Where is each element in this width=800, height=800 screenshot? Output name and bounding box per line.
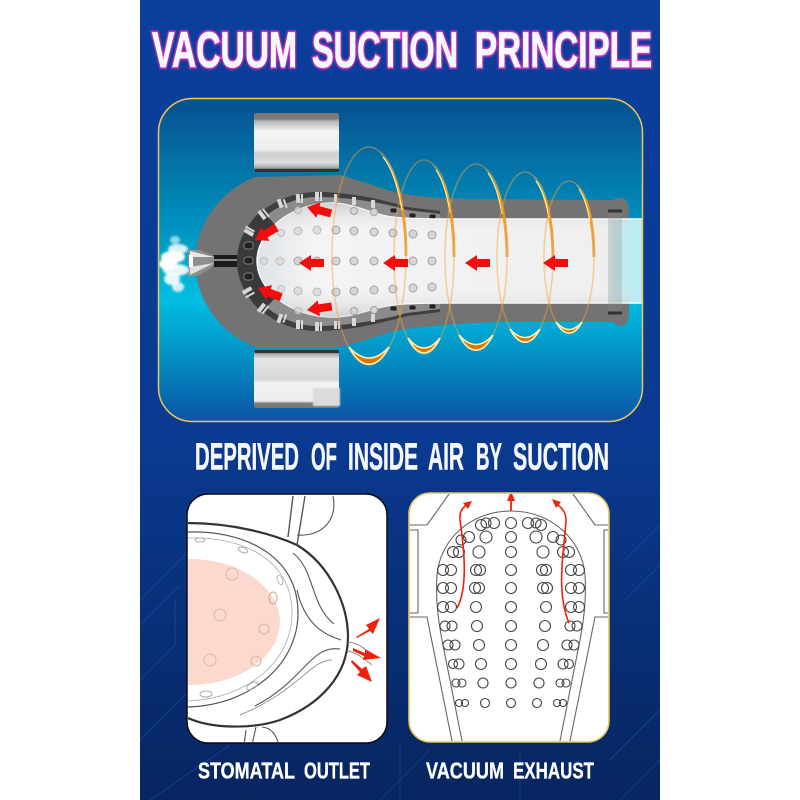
title (152, 22, 652, 78)
panel: stomatal outlet (186, 493, 388, 744)
subheading: INSIDE (348, 436, 418, 478)
ribs around cavity (242, 192, 375, 331)
ring 4 (497, 172, 553, 342)
title: VACUUM (152, 22, 297, 78)
air spray (159, 236, 189, 292)
top wing (254, 113, 339, 171)
bottom wing (254, 350, 340, 408)
ring 1 (332, 147, 406, 365)
subheading: AIR (428, 436, 464, 478)
inner dark ring (237, 192, 440, 331)
nubs (260, 206, 436, 314)
subheading: OF (311, 436, 337, 478)
title: SUCTION (312, 22, 458, 78)
panel: vacuum suction diagram (158, 98, 645, 422)
device body (195, 169, 629, 353)
title: PRINCIPLE (475, 22, 652, 78)
ring 5 (544, 181, 594, 333)
title: VACUUM (152, 22, 297, 78)
ring vents (244, 208, 436, 311)
label: stomatal outlet: STOMATAL (198, 758, 295, 784)
red airflow arrows (457, 491, 569, 623)
subheading: BY (476, 436, 502, 478)
label: vacuum exhaust: EXHAUST (513, 758, 594, 784)
blue background (140, 0, 660, 800)
pink area (188, 559, 280, 685)
cup line drawing (410, 494, 609, 741)
subheading: DEPRIVED (195, 436, 299, 478)
label: vacuum exhaust (426, 758, 594, 784)
panel: vacuum exhaust (409, 491, 609, 742)
red suction arrows (251, 199, 568, 318)
subheading (195, 436, 609, 478)
outlet line drawing (188, 496, 372, 745)
label: vacuum exhaust: VACUUM (426, 758, 504, 784)
transparent cavity (257, 203, 645, 317)
ring 2 (394, 160, 454, 354)
label: stomatal outlet: OUTLET (304, 758, 370, 784)
title: PRINCIPLE (475, 22, 652, 78)
subheading: SUCTION (513, 436, 609, 478)
nub circles (438, 518, 584, 708)
ring 3 (445, 164, 507, 350)
nozzle and tube (188, 250, 237, 277)
title: SUCTION (312, 22, 458, 78)
red outflow arrows (351, 618, 381, 682)
